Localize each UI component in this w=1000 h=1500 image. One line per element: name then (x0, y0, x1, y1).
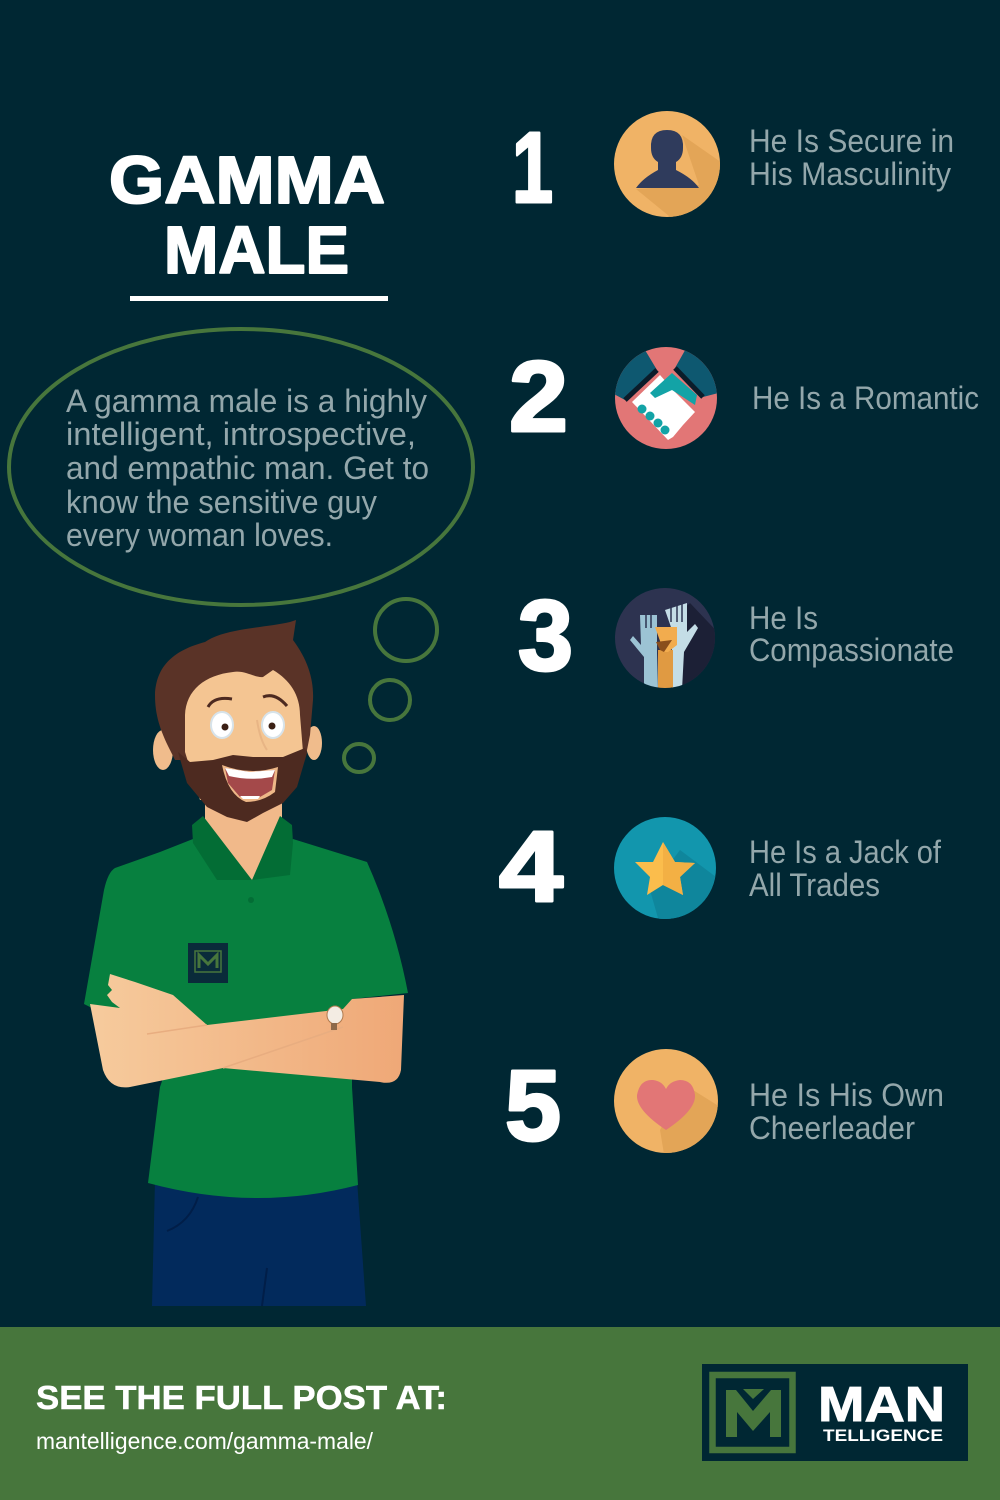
footer band (0, 1327, 1000, 1500)
item 1: His Masculinity (749, 156, 951, 192)
trousers (152, 1180, 366, 1306)
item 4: All Trades (749, 867, 880, 903)
logo: MAN (818, 1378, 945, 1432)
beard (178, 748, 307, 822)
item 2 (509, 341, 979, 453)
icon: heart (614, 1049, 718, 1153)
thought bubble with description: know the sensitive guy (66, 484, 377, 520)
item 3: Compassionate (749, 632, 954, 668)
item 3: 3 (518, 580, 573, 692)
thought bubble with description: every woman loves. (66, 517, 333, 553)
item 5: Cheerleader (749, 1110, 915, 1146)
title: MALE (164, 213, 349, 288)
shirt (84, 839, 408, 1198)
item 4 (499, 817, 941, 919)
item 1 (512, 111, 954, 225)
footer call to action: SEE THE FULL POST AT: (36, 1379, 447, 1416)
item 2: 2 (509, 341, 568, 453)
illustration: man with crossed arms (84, 620, 408, 1306)
thought circles (344, 599, 437, 772)
title (109, 143, 388, 301)
logo (702, 1364, 968, 1461)
item 5: He Is His Own (749, 1077, 944, 1113)
item 3: He Is (749, 600, 818, 636)
mouth (222, 765, 278, 802)
neck (205, 790, 282, 885)
ears (153, 726, 322, 770)
collar (192, 816, 293, 880)
thought bubble with description: A gamma male is a highly (66, 383, 427, 419)
title: GAMMA (109, 143, 385, 218)
shirt badge (188, 943, 228, 983)
thought bubble with description: intelligent, introspective, (66, 416, 416, 452)
item 4: 4 (499, 811, 563, 923)
item 3 (518, 588, 953, 688)
logo: TELLIGENCE (823, 1426, 943, 1445)
nose line (257, 720, 267, 750)
item 2: He Is a Romantic (752, 380, 979, 416)
shirt button (248, 897, 254, 903)
item 1: He Is Secure in (749, 123, 954, 159)
eyes (208, 696, 287, 738)
thought bubble with description (9, 329, 473, 605)
item 1: 1 (512, 112, 553, 224)
item 5 (505, 1049, 944, 1162)
crossed arms (90, 974, 404, 1087)
footer url: mantelligence.com/gamma-male/ (36, 1428, 374, 1454)
icon: handshake (615, 347, 717, 449)
icon: person (614, 111, 720, 217)
face (185, 670, 303, 800)
item 4: He Is a Jack of (749, 834, 941, 870)
watch (327, 1006, 343, 1030)
item 5: 5 (505, 1050, 561, 1162)
thought bubble with description: and empathic man. Get to (66, 450, 429, 486)
icon: star (614, 817, 720, 925)
hair (155, 620, 313, 760)
icon: raised hands (615, 588, 715, 688)
